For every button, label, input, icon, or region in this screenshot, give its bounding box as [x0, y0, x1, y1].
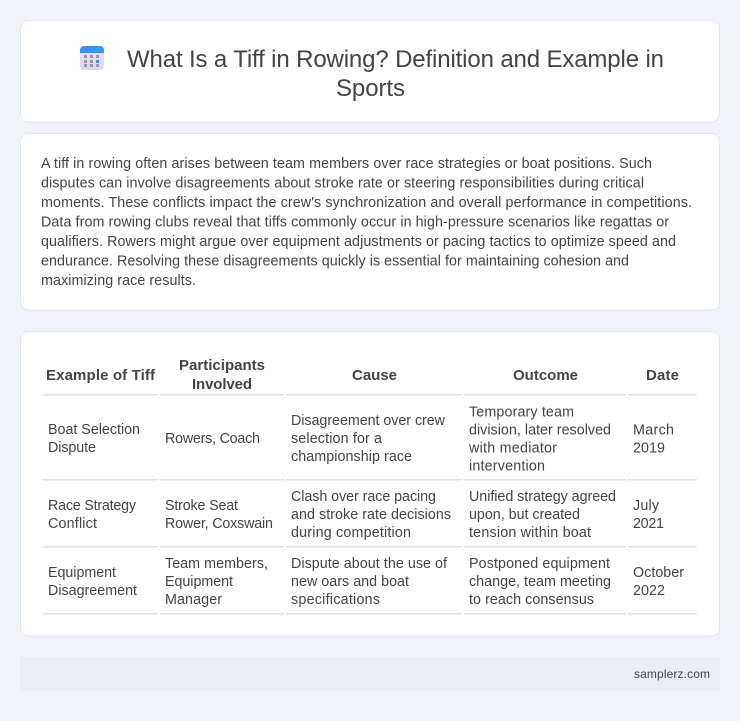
table header: Involved: [192, 376, 252, 393]
table row: race strategy conflict: upon, but created: [469, 507, 580, 523]
table row: boat selection dispute: Disagreement over crew: [291, 413, 446, 429]
table row: equipment disagreement: Postponed equipment: [469, 556, 610, 572]
table row: boat selection dispute: 2019: [633, 440, 665, 456]
text block: description paragraph: maximizing race results.: [41, 273, 196, 289]
table row: equipment disagreement: Equipment: [48, 565, 116, 581]
table row: race strategy conflict: Rower, Coxswain: [165, 516, 273, 532]
table row: equipment disagreement: Team members,: [165, 556, 268, 572]
panel: table card: [20, 332, 720, 636]
table header: [43, 357, 697, 396]
table row: boat selection dispute: championship race: [291, 449, 412, 465]
table row: equipment disagreement: to reach consensus: [469, 592, 594, 608]
footer: samplerz.com: [634, 667, 710, 681]
table row: race strategy conflict: [43, 489, 697, 548]
table row: equipment disagreement: 2022: [633, 583, 665, 599]
text block: description paragraph: disputes can involve disagreements about stroke rate or steering responsibilities during critical: [41, 176, 644, 192]
icon: calendar: [80, 46, 104, 70]
table row: boat selection dispute: [43, 404, 697, 480]
text block: description paragraph: endurance. Resolving these disagreements quickly is essential for maintaining cohesion and: [41, 254, 629, 270]
table row: equipment disagreement: new oars and boat: [291, 574, 409, 590]
table header: Outcome: [513, 367, 578, 384]
table row: race strategy conflict: and stroke rate decisions: [291, 507, 451, 523]
title: [127, 46, 664, 102]
table header: Cause: [352, 367, 397, 384]
text block: description paragraph: moments. These conflicts impact the crew's synchronization and overall performance in competitions.: [41, 195, 692, 211]
table row: boat selection dispute: intervention: [469, 458, 545, 474]
panel: title card: [20, 20, 720, 122]
text block: description paragraph: A tiff in rowing often arises between team members over race strategies or boat positions. Such: [41, 156, 652, 172]
text block: description paragraph: qualifiers. Rowers might argue over equipment adjustments or pacing tactics to optimize speed and: [41, 234, 676, 250]
title: Sports: [336, 75, 405, 102]
footer: [20, 657, 720, 691]
table row: race strategy conflict: Unified strategy agreed: [469, 489, 616, 505]
table row: equipment disagreement: change, team meeting: [469, 574, 611, 590]
table row: race strategy conflict: Stroke Seat: [165, 498, 238, 514]
table row: equipment disagreement: Dispute about the use of: [291, 556, 447, 572]
text block: description paragraph: [41, 156, 692, 289]
table row: equipment disagreement: [43, 556, 697, 614]
table row: race strategy conflict: July: [633, 498, 660, 514]
table row: equipment disagreement: Disagreement: [48, 583, 137, 599]
table row: boat selection dispute: Boat Selection: [48, 422, 140, 438]
title: What Is a Tiff in Rowing? Definition and Example in: [127, 46, 664, 73]
table header: Date: [646, 367, 679, 384]
table row: boat selection dispute: Rowers, Coach: [165, 431, 260, 447]
table row: race strategy conflict: during competition: [291, 525, 411, 541]
table row: boat selection dispute: with mediator: [468, 440, 557, 456]
table row: race strategy conflict: Clash over race pacing: [291, 489, 436, 505]
table row: boat selection dispute: Temporary team: [469, 404, 574, 420]
table row: boat selection dispute: March: [633, 422, 674, 438]
table row: equipment disagreement: Equipment: [165, 574, 233, 590]
table row: equipment disagreement: specifications: [291, 592, 380, 608]
table row: race strategy conflict: 2021: [633, 516, 664, 532]
table row: equipment disagreement: October: [633, 565, 684, 581]
table row: equipment disagreement: Manager: [165, 592, 222, 608]
panel: description: [20, 134, 720, 310]
table row: race strategy conflict: tension within boat: [469, 525, 591, 541]
table row: boat selection dispute: selection for a: [291, 431, 382, 447]
table row: boat selection dispute: Dispute: [48, 440, 96, 456]
table row: race strategy conflict: Conflict: [48, 516, 97, 532]
text block: description paragraph: Data from rowing clubs reveal that tiffs commonly occur in high-pressure scenarios like regattas or: [41, 214, 669, 230]
table row: race strategy conflict: Race Strategy: [48, 498, 137, 514]
table header: Example of Tiff: [46, 367, 156, 384]
table header: Participants: [179, 357, 265, 374]
table row: boat selection dispute: division, later resolved: [469, 422, 611, 438]
